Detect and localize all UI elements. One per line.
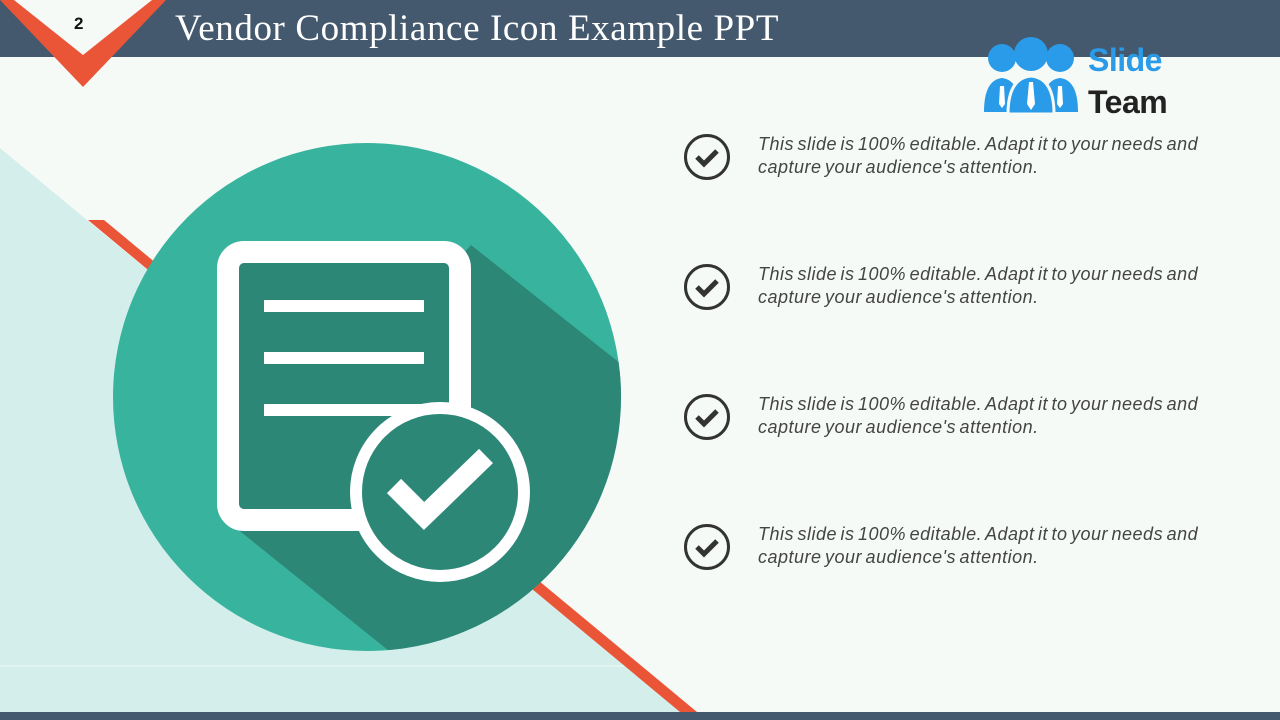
text 1: This slide is 100% editable. Adapt it to your needs and	[758, 134, 1198, 154]
title: Vendor Compliance Icon Example PPT	[175, 8, 779, 49]
text 3: capture your audience's attention.	[758, 417, 1039, 437]
header bar	[0, 0, 1280, 57]
item 2	[684, 264, 730, 310]
pale teal region	[0, 148, 682, 712]
check items	[684, 134, 730, 570]
text 4: capture your audience's attention.	[758, 547, 1039, 567]
text 2: This slide is 100% editable. Adapt it to your needs and	[758, 264, 1198, 284]
text 1: capture your audience's attention.	[758, 157, 1039, 177]
text 3	[758, 394, 1198, 437]
text 3: This slide is 100% editable. Adapt it to your needs and	[758, 394, 1198, 414]
text 4: This slide is 100% editable. Adapt it to your needs and	[758, 524, 1198, 544]
text 4	[758, 524, 1198, 567]
item 3	[684, 394, 730, 440]
text 1	[758, 134, 1198, 177]
logo: Team	[1088, 84, 1167, 120]
item 1	[684, 134, 730, 180]
slide number: 2	[74, 14, 83, 33]
logo: Slide	[1088, 42, 1162, 78]
logo	[984, 37, 1167, 120]
text 2	[758, 264, 1198, 307]
orange chevron	[0, 0, 166, 87]
bottom bar	[0, 712, 1280, 720]
big circle icon	[113, 143, 621, 651]
orange stripe	[88, 220, 697, 712]
text 2: capture your audience's attention.	[758, 287, 1039, 307]
item 4	[684, 524, 730, 570]
